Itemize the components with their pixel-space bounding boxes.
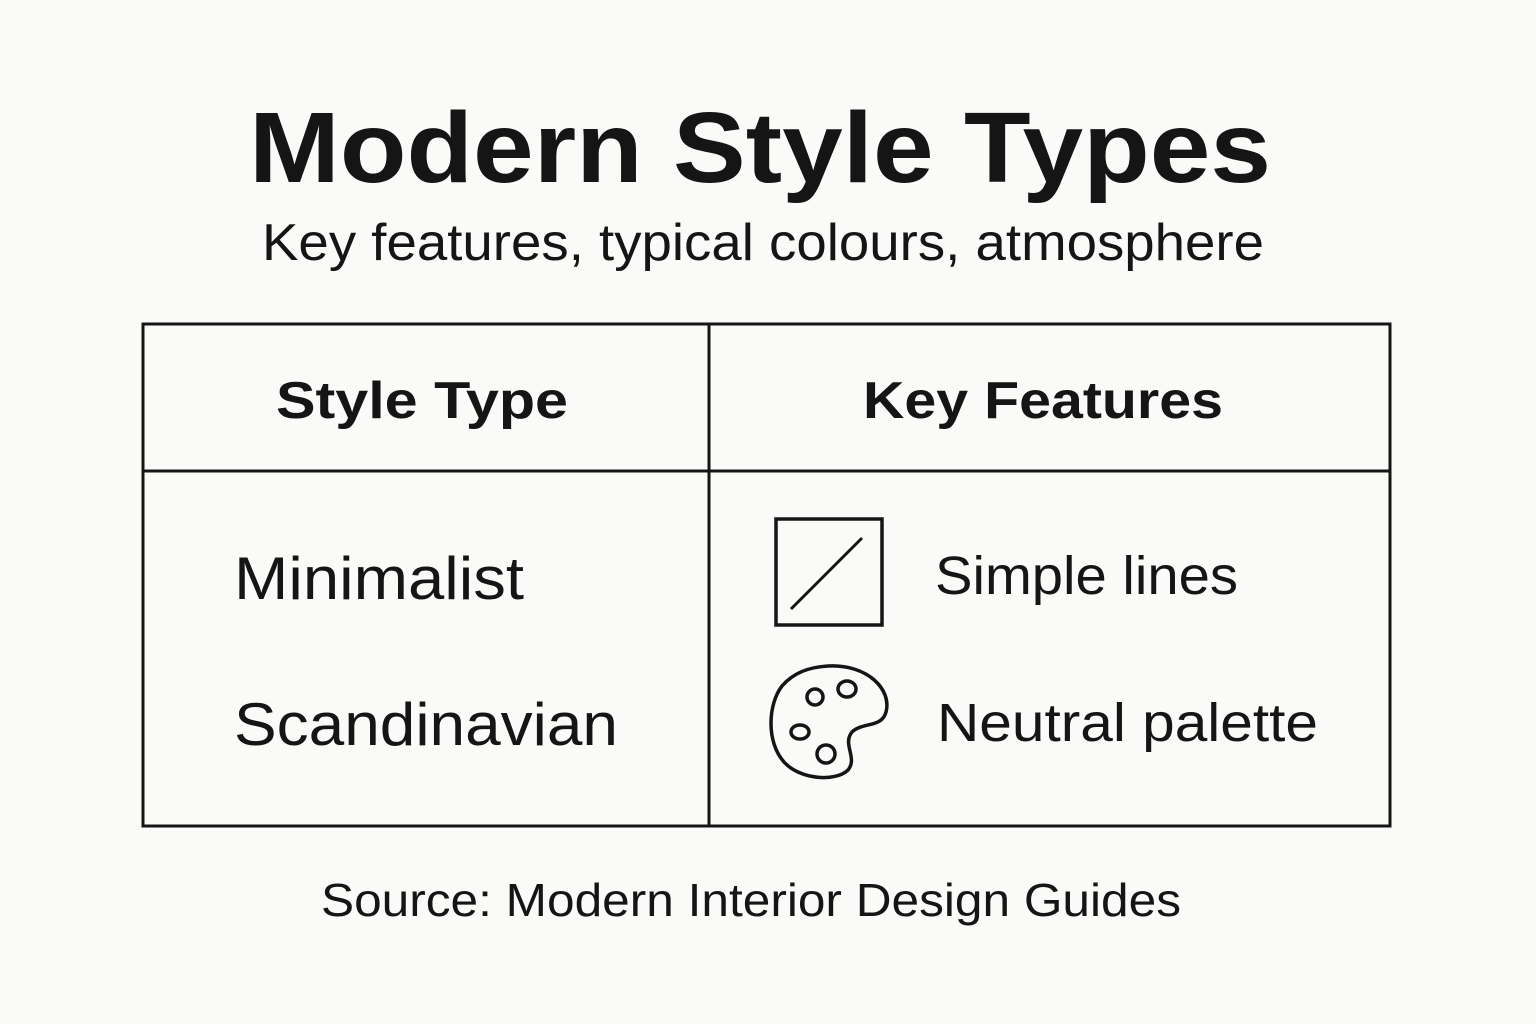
- source note: Source: Modern Interior Design Guides: [321, 874, 1181, 926]
- row label: Minimalist: Minimalist: [234, 545, 524, 612]
- title: Modern Style Types: [249, 92, 1271, 204]
- table: [143, 324, 1390, 826]
- subtitle: Key features, typical colours, atmosphere: [262, 214, 1264, 272]
- feature: Simple lines: Simple lines: [935, 546, 1238, 606]
- header: key features: Key Features: [863, 372, 1223, 430]
- row label: Scandinavian: Scandinavian: [234, 691, 618, 758]
- icon: simple lines square: [776, 519, 882, 625]
- feature: Neutral palette: Neutral palette: [937, 693, 1318, 753]
- icon: palette: [771, 666, 887, 778]
- header: style type: Style Type: [276, 372, 568, 430]
